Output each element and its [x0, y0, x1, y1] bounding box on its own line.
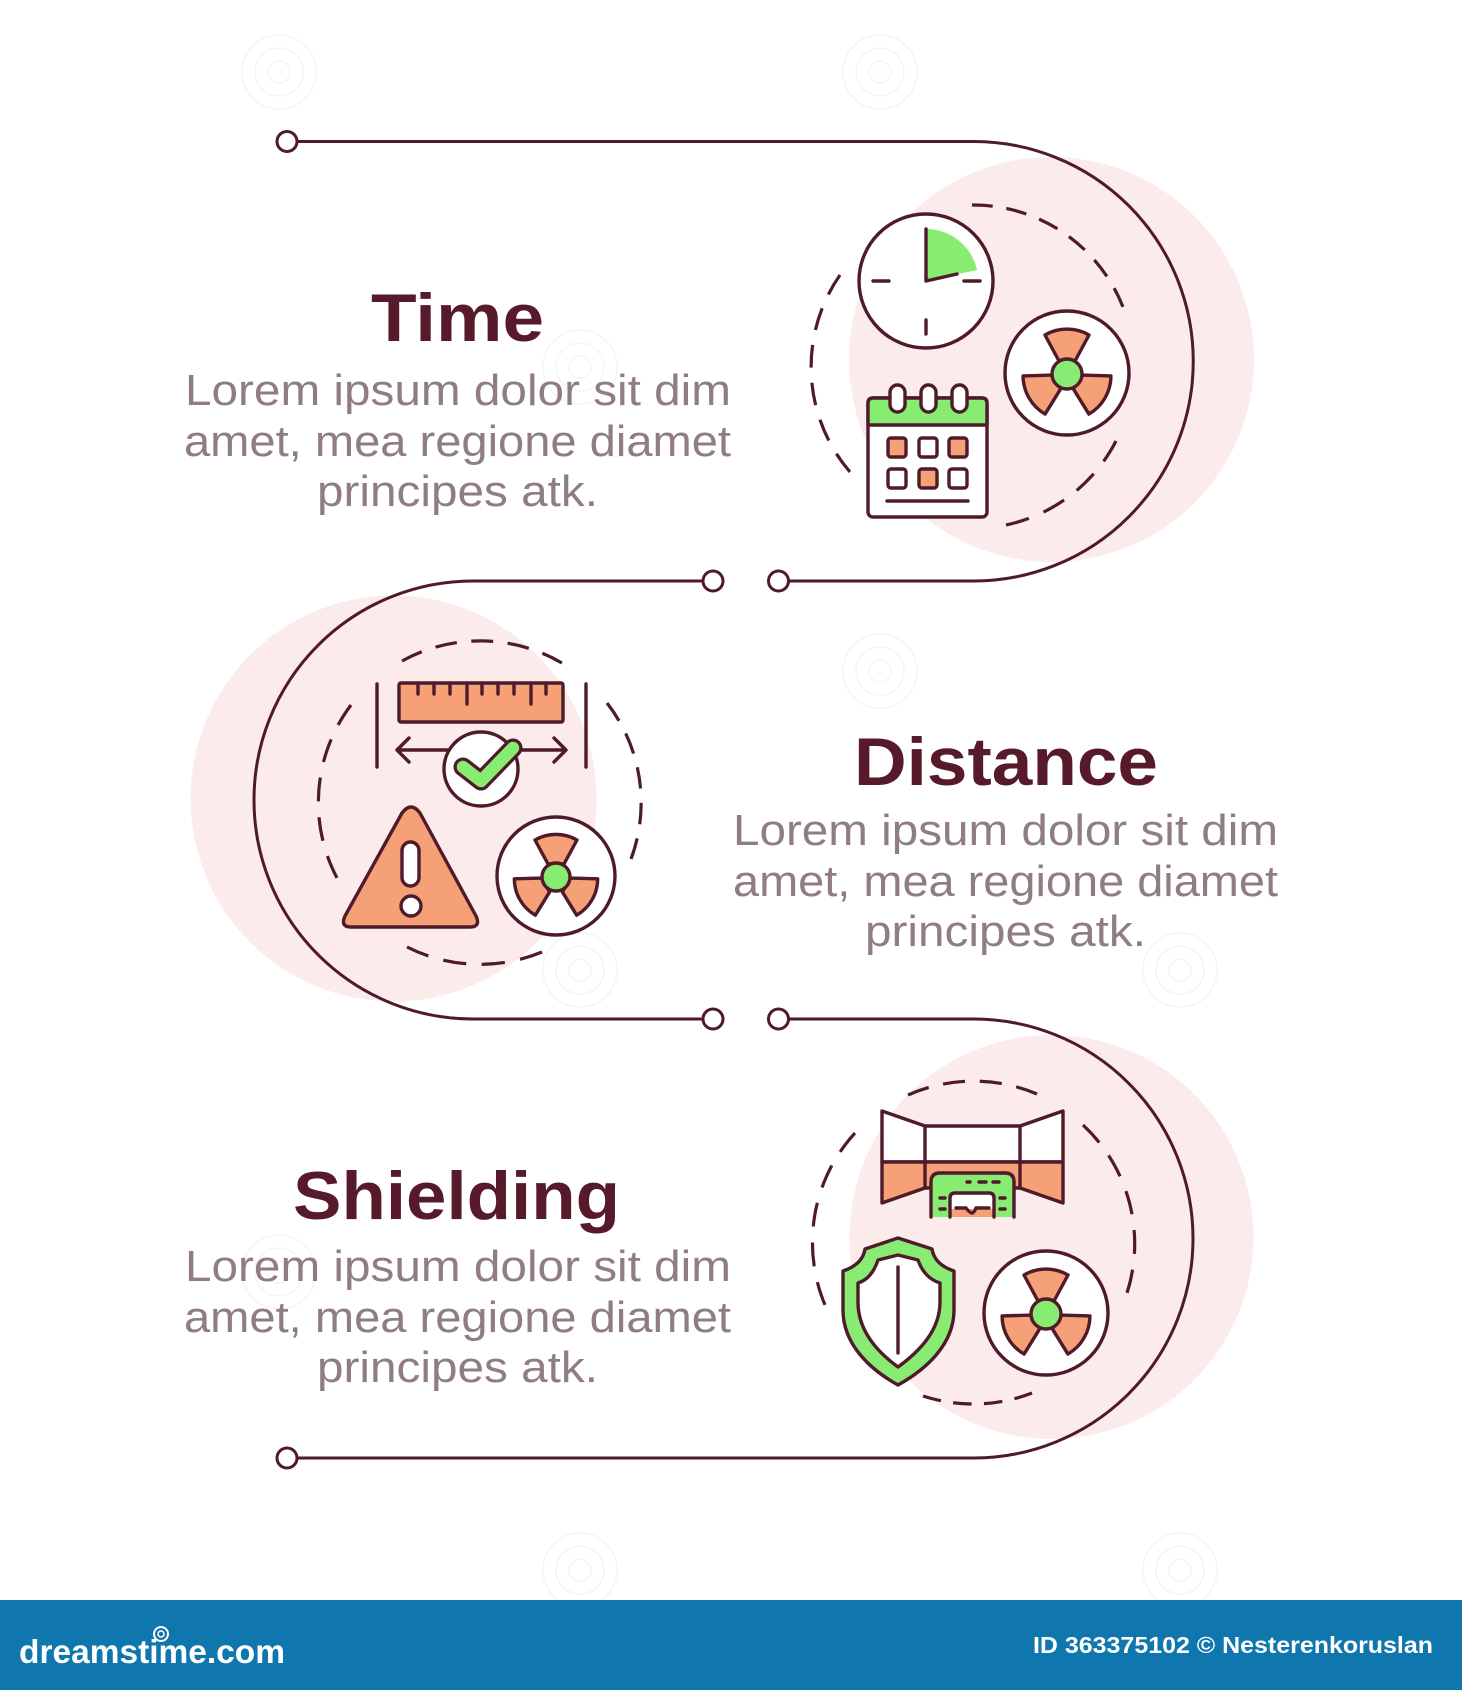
icon: warning triangle: [343, 807, 478, 927]
pink background circle: distance: [190, 596, 596, 1002]
icon: clock: [859, 214, 993, 348]
text block: time: [184, 366, 731, 516]
icon: check mark: [444, 732, 518, 806]
text block: distance: amet, mea regione diamet: [733, 857, 1278, 906]
heading: Time: Time: [371, 280, 544, 356]
footer credit: ID 363375102 © Nesterenkoruslan: [1033, 1632, 1433, 1658]
text block: distance: principes atk.: [865, 907, 1146, 956]
text block: shielding: Lorem ipsum dolor sit dim: [185, 1242, 731, 1291]
text block: distance: Lorem ipsum dolor sit dim: [733, 806, 1278, 855]
heading: Shielding: Shielding: [293, 1158, 620, 1234]
text block: shielding: amet, mea regione diamet: [184, 1293, 731, 1342]
icon: calendar: [868, 385, 987, 517]
icon: ruler with distance arrow: [377, 683, 586, 767]
text block: shielding: [184, 1242, 731, 1392]
icon: radiation sign: [497, 817, 615, 935]
footer logo: dreamstime.com: [19, 1633, 285, 1670]
icon: shielded room: [882, 1111, 1063, 1217]
dashed ring: distance: [318, 641, 641, 964]
panel: shielding: [184, 1035, 1254, 1439]
footer bar: [0, 1600, 1462, 1690]
dashed ring: time: [811, 205, 1123, 525]
pink background circle: shielding: [850, 1035, 1254, 1439]
text block: time: amet, mea regione diamet: [184, 417, 731, 466]
panel: time: [184, 157, 1254, 562]
heading: Distance: Distance: [854, 724, 1158, 800]
text block: shielding: principes atk.: [317, 1343, 598, 1392]
text block: time: Lorem ipsum dolor sit dim: [185, 366, 731, 415]
text block: time: principes atk.: [317, 467, 598, 516]
icon: radiation sign: [1005, 311, 1129, 435]
pink background circle: time: [849, 157, 1254, 562]
dashed ring: shielding: [812, 1081, 1135, 1404]
connector line: serpentine timeline: [254, 132, 1193, 1468]
panel: distance: [190, 596, 1278, 1002]
icon: radiation sign: [984, 1251, 1108, 1375]
text block: distance: [733, 806, 1278, 956]
icon: shield: [843, 1238, 954, 1385]
